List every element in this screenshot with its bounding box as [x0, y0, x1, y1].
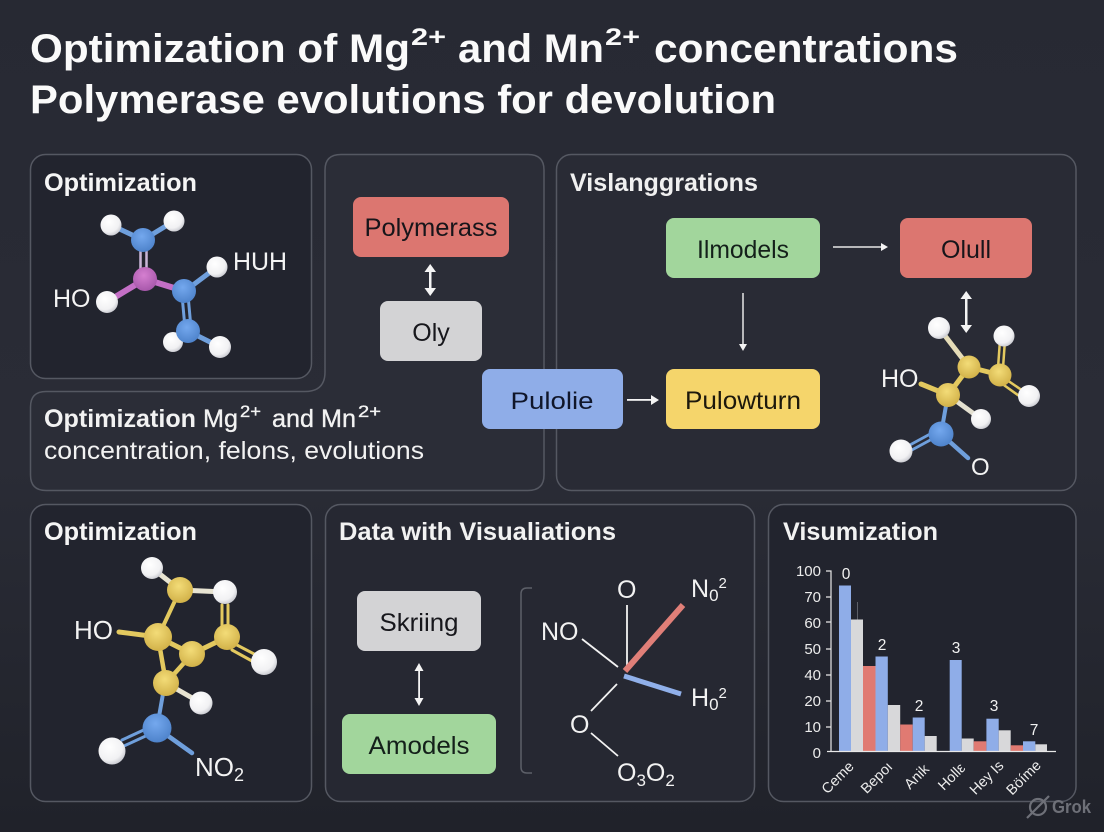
box: pulowturn: Pulowturn [685, 387, 801, 415]
title: Optimization of Mg [30, 27, 410, 71]
arrow: skriing to amodels [414, 663, 424, 706]
panel: L-shaped polymerase and concentration panel [30, 154, 544, 490]
panel: top-left molecule [30, 154, 312, 378]
category labels: Hey Is [967, 758, 1007, 798]
category labels [819, 758, 1045, 799]
heading: data with visualiations: Data with Visualiations [339, 518, 616, 546]
axis labels: 0 [813, 745, 821, 762]
arrow: ilmodels to olull [833, 243, 888, 251]
panel: visualization flow [556, 154, 1076, 490]
text block: concentration: concentration, felons, evolutions [44, 437, 424, 465]
text block: concentration: Mg [203, 405, 238, 433]
molecule: top-left [53, 210, 287, 358]
diagram: bond structure: O [617, 576, 636, 604]
box: pulowturn [666, 369, 820, 429]
bars [839, 586, 1047, 752]
molecule: bottom-left: HO [74, 615, 113, 645]
heading: optimization: Optimization [44, 518, 197, 546]
axis labels: 20 [804, 693, 821, 710]
axis labels: 50 [804, 641, 821, 658]
category labels: Anik [902, 761, 933, 793]
molecule: bottom-left [74, 557, 277, 785]
box: ilmodels [666, 218, 820, 278]
text block: concentration: and Mn [272, 405, 356, 433]
box: oly [380, 301, 482, 361]
title: 2+ [605, 24, 640, 51]
diagram: bond structure: 0 [709, 586, 719, 605]
molecule: top-left: HUH [233, 248, 287, 276]
arrow: ilmodels to pulowturn [739, 293, 747, 351]
panel: bottom-left molecule [30, 504, 312, 802]
box: amodels [342, 714, 496, 774]
box: oly: Oly [412, 319, 450, 347]
box: skriing [357, 591, 481, 651]
box: ilmodels: Ilmodels [697, 236, 789, 264]
heading: visumization: Visumization [783, 518, 938, 546]
molecule: top-left: HO [53, 285, 90, 313]
axis labels: 100 [796, 563, 821, 580]
panel: data with visualizations [326, 504, 754, 802]
molecule: bottom-left: 2 [234, 765, 244, 785]
box: skriing: Skriing [380, 609, 458, 637]
molecule: right: HO [881, 365, 918, 393]
title: concentrations [654, 27, 958, 71]
diagram: bond structure: O [617, 759, 636, 787]
value labels: 2 [915, 698, 923, 715]
diagram: bond structure: 2 [719, 685, 727, 702]
molecule: right: O [971, 454, 990, 481]
value labels: 0 [842, 566, 851, 583]
category labels: Ceme [819, 759, 858, 798]
category labels: Böíme [1004, 758, 1045, 799]
watermark: Grok [1027, 796, 1092, 818]
arrow: olull to molecule [960, 291, 972, 333]
arrow: pulolie to pulowturn [627, 395, 659, 405]
box: pulolie: Pulolie [510, 388, 594, 415]
diagram: bond structure: 2 [719, 575, 727, 592]
box: pulolie [482, 369, 623, 429]
box: olull: Olull [941, 236, 991, 264]
diagram: bond structure: O [570, 711, 589, 739]
arrow: polymerass to oly [424, 264, 436, 296]
value labels: 7 [1030, 722, 1038, 739]
diagram: bond structure: H [691, 684, 709, 712]
axis labels: 60 [804, 615, 821, 632]
molecule: right [881, 317, 1040, 481]
panel: visumization chart [768, 504, 1076, 802]
text block: concentration [44, 402, 424, 465]
bracket [521, 588, 532, 773]
diagram: bond structure: 3 [636, 771, 646, 790]
diagram: bond structure: NO [541, 618, 578, 646]
category labels: Bepoı [858, 759, 896, 797]
diagram: bond structure: O [646, 759, 665, 787]
value labels [842, 566, 1038, 739]
title: Polymerase evolutions for devolution [30, 78, 776, 122]
value labels: 2 [878, 637, 886, 654]
molecule: bottom-left: NO [195, 752, 234, 782]
diagram: bond structure: N [691, 575, 709, 603]
box: polymerass [353, 197, 509, 257]
heading: optimization: Optimization [44, 169, 197, 197]
axis labels: 70 [804, 589, 821, 606]
axis labels: 40 [804, 667, 821, 684]
title: and Mn [458, 27, 604, 71]
box: polymerass: Polymerass [364, 214, 498, 242]
text block: concentration: Optimization [44, 405, 196, 433]
diagram: bond structure: 0 [709, 695, 719, 714]
title: 2+ [411, 24, 446, 51]
axis labels [796, 563, 821, 762]
text block: concentration: 2+ [358, 402, 381, 421]
box: olull [900, 218, 1032, 278]
diagram: bond structure [541, 575, 727, 790]
value labels: 3 [990, 698, 998, 715]
axis labels: 10 [804, 719, 821, 736]
box: amodels: Amodels [368, 732, 470, 760]
watermark: Grok: Grok [1052, 797, 1092, 817]
bar chart [796, 563, 1056, 799]
title [30, 24, 958, 122]
value labels: 3 [952, 640, 960, 657]
category labels: Hollε [935, 760, 969, 794]
diagram: bond structure: 2 [665, 771, 675, 790]
heading: vislanggrations: Vislanggrations [570, 169, 758, 197]
text block: concentration: 2+ [240, 402, 261, 421]
